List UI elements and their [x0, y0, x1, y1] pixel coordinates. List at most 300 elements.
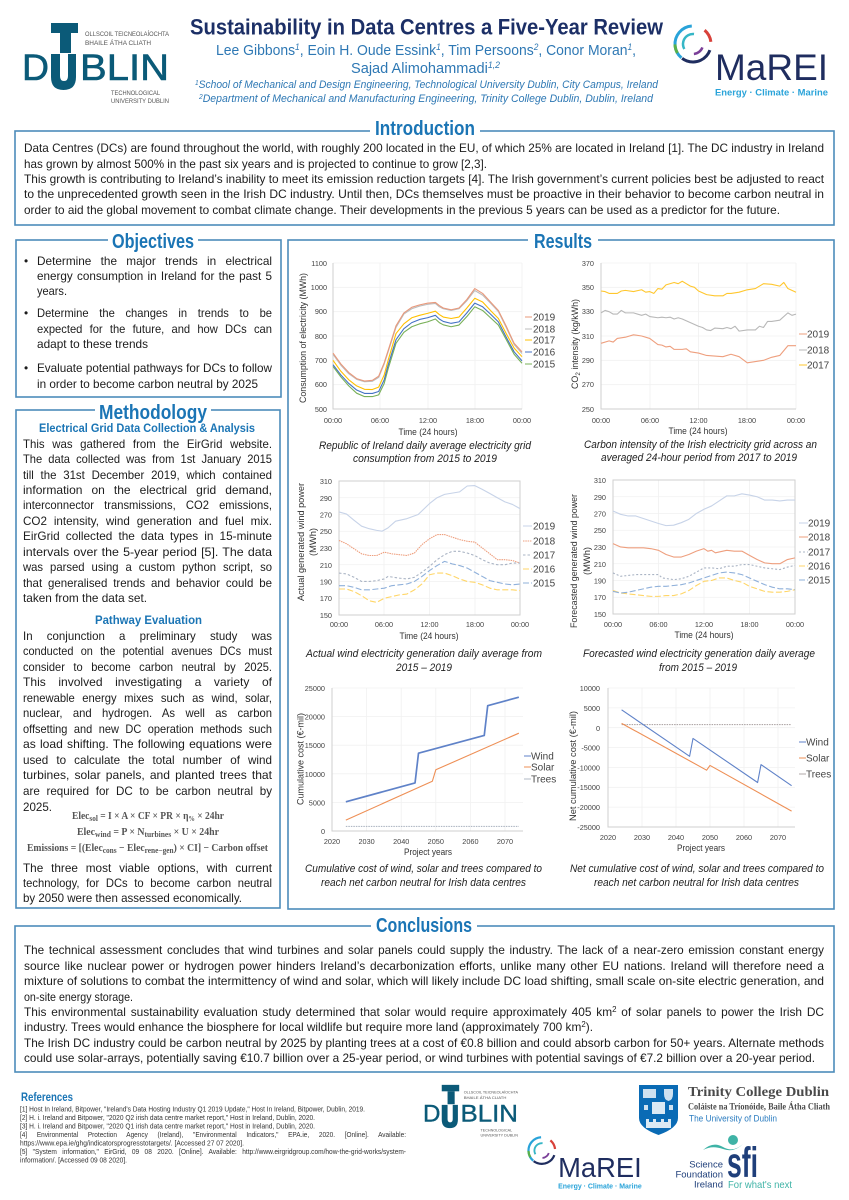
chart: cumulative cost: 10000 — [305, 770, 325, 779]
chart: electricity consumption: 800 — [315, 332, 327, 341]
chart: cumulative cost: Cumulative cost (€-mil) — [296, 713, 306, 805]
text block: pathway evaluation: renewable energy mixes such as wind, solar, — [23, 691, 272, 705]
heading: methodology: Methodology — [99, 401, 207, 424]
equations: × 24hr — [195, 811, 224, 822]
chart: actual wind generation: 18:00 — [466, 620, 484, 629]
authors: 1 — [436, 42, 441, 52]
chart: forecasted wind generation: 250 — [594, 526, 606, 535]
authors: Sajad Alimohammadi — [351, 60, 492, 77]
logo: Trinity College Dublin: Trinity College Dublin — [688, 1085, 829, 1100]
text block: introduction: to the unprecedented growth seen in the Irish DC industry. Until then, DCs themselves must be proactive in their behavior to become carbon neutral in — [24, 187, 824, 201]
chart: cumulative cost: 2060 — [462, 837, 479, 846]
logo: TU Dublin (footer): OLLSCOIL TEICNEOLAÍOCHTA — [464, 1089, 518, 1094]
authors: 1,2 — [488, 60, 500, 70]
bullet list: objectives: years. — [37, 284, 67, 298]
chart: cumulative cost: 2030 — [358, 837, 375, 846]
text block: data collection: that generalised trends and behavior could be — [23, 576, 272, 590]
legend: Trees — [531, 774, 556, 786]
legend: 2017 — [808, 548, 831, 558]
text block: pathway evaluation: consider to become carbon neutral by 2025. — [23, 660, 272, 674]
text block: conclusions: 2 — [581, 1020, 586, 1029]
text block: conclusions: on-site energy storage. — [24, 990, 133, 1004]
legend: 2017 — [807, 360, 830, 372]
authors: 1 — [295, 42, 300, 52]
text block: viable options: The three most viable options, with current — [23, 861, 273, 875]
logo: Science Foundation Ireland: Foundation — [675, 1170, 723, 1180]
chart: carbon intensity: 18:00 — [738, 416, 756, 425]
references: [2] H. i. Ireland and Bitpower, "2020 Q2 irish data centre market report," Host in Ireland, Dublin, 2020. — [20, 1113, 315, 1122]
logo: TU Dublin (footer): BLIN — [460, 1101, 518, 1128]
chart: net cumulative cost: -5000 — [581, 744, 600, 752]
text block: conclusions — [24, 943, 824, 1065]
chart: net cumulative cost: 2060 — [736, 833, 752, 842]
data series 2019-2017 — [601, 281, 796, 363]
panel: results — [288, 230, 834, 909]
text block: conclusions: The technical assessment concludes that wind turbines and solar panels could supply the industry. The lack of a near-zero emission constant energy — [24, 943, 824, 957]
chart: electricity consumption: 1000 — [311, 283, 327, 292]
text block: data collection: EirGrid collected the data types in 15-minute — [23, 529, 272, 543]
chart: actual wind generation: 190 — [320, 578, 332, 586]
chart: forecasted wind generation: 310 — [594, 476, 606, 485]
chart: net cumulative cost: 10000 — [580, 684, 600, 693]
logo: MaREI: MaREI — [715, 47, 828, 88]
chart: forecasted wind generation: Forecasted generated wind power — [569, 494, 579, 628]
data series 2019-2015 — [339, 486, 520, 602]
logo: Trinity College Dublin — [639, 1085, 830, 1135]
text block: data collection: information on the electrical grid demand, — [23, 483, 272, 497]
equations: rene−gen — [145, 846, 174, 855]
chart: actual wind generation: 250 — [320, 527, 332, 536]
text block: data collection: The data collected was from 1st January 2015 — [23, 452, 272, 466]
chart: actual wind generation: 00:00 — [330, 620, 348, 629]
data series wind, solar, trees — [346, 697, 519, 826]
chart: cumulative cost — [296, 684, 556, 889]
logo: TU Dublin: OLLSCOIL TEICNEOLAÍOCHTA — [85, 31, 169, 38]
bullet list: objectives — [24, 254, 272, 391]
authors — [216, 42, 636, 77]
legend: 2018 — [533, 324, 556, 336]
legend: 2016 — [808, 562, 831, 572]
heading: introduction: Introduction — [375, 117, 475, 140]
data series 2019-2015 — [333, 289, 522, 397]
title: Sustainability in Data Centres a Five-Year Review — [190, 14, 664, 40]
chart: net cumulative cost: Project years — [677, 843, 725, 853]
chart: cumulative cost: 2070 — [497, 837, 513, 846]
chart: cumulative cost: 20000 — [305, 712, 325, 722]
text block: viable options: by 2050 were then assessed economically. — [23, 891, 242, 905]
affiliations: School of Mechanical and Design Engineering, Technological University Dublin, City Campus, Ireland — [199, 79, 659, 91]
caption — [319, 440, 532, 465]
chart: net cumulative cost: 0 — [596, 724, 600, 733]
affiliations: 2 — [198, 94, 203, 101]
legend — [799, 738, 831, 780]
chart: carbon intensity: intensity (kg/kWh) — [570, 299, 580, 372]
chart: electricity consumption: 00:00 — [324, 416, 342, 425]
text block: viable options — [23, 861, 273, 905]
chart: net cumulative cost: 2020 — [600, 833, 616, 842]
chart: cumulative cost: 15000 — [305, 741, 325, 750]
chart: forecasted wind generation: Time (24 hours) — [674, 630, 734, 640]
chart: electricity consumption: Time (24 hours) — [398, 427, 458, 437]
affiliations — [195, 79, 659, 105]
chart: net cumulative cost: -20000 — [577, 803, 600, 812]
text block: data collection — [22, 437, 272, 605]
legend: Solar — [806, 754, 830, 764]
references: [1] Host In Ireland, Bitpower, "Ireland's Data Hosting Industry Q1 2019 Update," Host In Ireland, Bitpower, Dublin, 2019. — [20, 1104, 365, 1114]
equations: Elec — [72, 811, 91, 822]
caption — [583, 648, 815, 674]
chart: actual wind generation: Actual generated wind power — [296, 483, 306, 601]
panel: conclusions — [15, 914, 834, 1072]
chart: actual wind generation: 00:00 — [511, 620, 529, 629]
caption — [570, 863, 824, 889]
text block: viable options: technology, for DCs to become carbon neutral — [23, 876, 272, 890]
legend: 2015 — [533, 360, 556, 370]
logo: Science Foundation Ireland: Science — [689, 1160, 723, 1170]
text block: conclusions: ). — [586, 1020, 593, 1034]
logo: Science Foundation Ireland: sfi — [727, 1139, 758, 1187]
text block: pathway evaluation: nuclear, and hydrogen. As well as carbon — [23, 706, 272, 720]
authors: Lee Gibbons — [216, 42, 301, 59]
logo: TU Dublin — [22, 23, 169, 105]
chart: net cumulative cost: -15000 — [577, 783, 600, 792]
equations: % — [189, 815, 195, 823]
equations: = P × N — [111, 827, 145, 838]
logo: TU Dublin (footer): UNIVERSITY DUBLIN — [481, 1133, 518, 1138]
chart: forecasted wind generation: 190 — [594, 576, 606, 586]
bullet list: objectives: Determine the major trends in electrical — [37, 254, 272, 268]
legend: 2015 — [533, 578, 556, 590]
logo: TU Dublin: TECHNOLOGICAL — [111, 91, 161, 97]
text block: introduction: order to aid the global movement to combat climate change. Their developments in the previous 5 years can be used as a predictor for the future. — [24, 203, 780, 217]
chart: electricity consumption: 00:00 — [513, 416, 531, 425]
chart: net cumulative cost: -10000 — [577, 764, 600, 772]
chart: carbon intensity: 350 — [582, 283, 594, 292]
chart: net cumulative cost: 2040 — [668, 833, 684, 842]
chart: cumulative cost: 2040 — [393, 837, 409, 846]
chart: forecasted wind generation: 270 — [594, 510, 606, 518]
logo: TU Dublin: D — [22, 47, 49, 88]
chart: actual wind generation: 150 — [320, 611, 332, 620]
chart: net cumulative cost: 2030 — [634, 833, 650, 842]
legend: 2018 — [807, 346, 830, 356]
chart: forecasted wind generation: 00:00 — [604, 620, 622, 629]
chart: forecasted wind generation: 06:00 — [649, 620, 668, 629]
logo: TU Dublin: BLIN — [80, 47, 169, 88]
chart: electricity consumption: 06:00 — [371, 416, 389, 425]
chart: electricity consumption: 700 — [315, 356, 327, 365]
caption — [305, 648, 542, 674]
bullet list: objectives: • — [24, 254, 28, 268]
text block: pathway evaluation: as load shifting. The following equations were — [23, 737, 272, 751]
chart: forecasted wind generation: 230 — [594, 543, 606, 552]
logo: TU Dublin (footer): BHAILE ÁTHA CLIATH — [464, 1095, 507, 1100]
chart: actual wind generation: Time (24 hours) — [400, 631, 458, 641]
affiliations: Department of Mechanical and Manufacturing Engineering, Trinity College Dublin, Dublin, Ireland — [203, 93, 654, 105]
text block: pathway evaluation: In conjunction a preliminary study was — [23, 629, 272, 643]
chart: actual wind generation: 270 — [320, 510, 332, 520]
chart: net cumulative cost: 2070 — [770, 833, 786, 842]
equations: × U × 24hr — [171, 827, 219, 838]
panel: methodology — [16, 401, 280, 908]
references: [5] "System information," EirGrid, 09 08 2020. [Online]. Available: http://www.eirgridgroup.com/how-the-grid-works/system- — [20, 1147, 406, 1156]
legend — [524, 752, 556, 786]
caption: Republic of Ireland daily average electricity grid — [319, 440, 532, 452]
logo: Trinity College Dublin: Coláiste na Tríonóide, Baile Átha Cliath — [688, 1102, 830, 1112]
chart: forecasted wind generation — [569, 476, 831, 674]
legend: 2019 — [533, 522, 556, 532]
equations: Elec — [77, 827, 96, 838]
affiliations: 1 — [195, 80, 199, 87]
references: References — [21, 1092, 73, 1104]
equations: turbines — [145, 830, 171, 839]
text block: data collection: CO2 intensity, wind generation and fuel mix. — [23, 514, 272, 528]
chart: cumulative cost: 5000 — [309, 798, 325, 808]
text block: pathway evaluation: This involved investigating a variety of — [23, 675, 273, 689]
text block: pathway evaluation — [23, 629, 273, 814]
caption: reach net carbon neutral for Irish data centres — [321, 877, 527, 889]
bullet list: objectives: • — [24, 306, 28, 320]
heading: conclusions: Conclusions — [376, 914, 472, 937]
equations: cons — [103, 846, 117, 855]
caption: averaged 24-hour period from 2017 to 2019 — [601, 452, 797, 464]
chart: net cumulative cost: Net cumulative cost (€-mil) — [568, 711, 578, 821]
bullet list: objectives: in order to become carbon neutral by 2025 — [37, 377, 258, 391]
chart: carbon intensity: 06:00 — [641, 416, 659, 425]
chart: carbon intensity: 370 — [582, 259, 594, 268]
chart: carbon intensity: 290 — [582, 356, 594, 365]
heading: objectives: Objectives — [112, 230, 194, 253]
legend: Wind — [531, 752, 554, 762]
text block: conclusions: mixture of solutions to combat the intermittency of wind and solar, which will likely include DC load shifting, small scale on-site electric generation, and — [24, 974, 824, 988]
equations: Emissions = [(Elec — [27, 843, 109, 854]
chart: cumulative cost: 2050 — [428, 837, 444, 846]
chart: forecasted wind generation: 12:00 — [695, 620, 713, 629]
equations: ) × CI] − Carbon offset — [174, 843, 268, 854]
equations — [27, 811, 268, 855]
chart: forecasted wind generation: 290 — [594, 493, 606, 502]
logo: MaREI: Energy · Climate · Marine — [715, 88, 828, 98]
legend: 2015 — [808, 576, 831, 586]
logo: Science Foundation Ireland: Ireland — [694, 1180, 723, 1190]
legend — [523, 522, 556, 590]
chart: net cumulative cost — [568, 684, 831, 889]
legend: 2017 — [533, 336, 556, 346]
legend: 2017 — [533, 550, 556, 562]
chart: forecasted wind generation: 00:00 — [786, 620, 804, 629]
text block: pathway evaluation: conducted on the potential avenues DCs must — [23, 644, 273, 658]
chart: electricity consumption: 900 — [315, 307, 327, 316]
chart: electricity consumption: Consumption of electricity (MWh) — [298, 273, 308, 403]
legend: 2016 — [533, 348, 556, 358]
authors: 1 — [627, 42, 632, 52]
text block: data collection: This was gathered from the EirGrid website. — [23, 437, 272, 451]
subheading: electrical grid data: Electrical Grid Data Collection & Analysis — [39, 423, 255, 435]
authors: , Tim Persoons — [441, 42, 534, 59]
logo: Science Foundation Ireland: For what's next — [728, 1179, 792, 1191]
logo: MaREI (footer): MaREI — [558, 1152, 642, 1183]
logo: MaREI (footer) — [523, 1132, 642, 1191]
text block: conclusions: of solar panels to power the Irish DC — [617, 1005, 824, 1019]
logo: Science Foundation Ireland — [675, 1135, 792, 1191]
legend: 2018 — [808, 532, 831, 544]
chart: carbon intensity: 00:00 — [787, 416, 805, 425]
chart: forecasted wind generation: 150 — [594, 610, 606, 619]
references: [4] Environmental Protection Agency (Ireland), "Environmental Indicators," EPA.ie, 2020. [Online]. Available: — [20, 1130, 406, 1139]
text block: pathway evaluation: are required for DC to be carbon neutral by — [23, 784, 272, 798]
chart: actual wind generation: 12:00 — [420, 620, 439, 629]
subheading: pathway evaluation: Pathway Evaluation — [95, 615, 202, 627]
references: [3] H. i. Ireland and Bitpower, "2020 Q1 irish data centre market report," Host in Ireland, Dublin, 2020. — [20, 1122, 315, 1130]
equations: sol — [89, 814, 99, 823]
caption: reach net carbon neutral for Irish data centres — [594, 877, 800, 889]
logo: TU Dublin (footer): TECHNOLOGICAL — [481, 1127, 513, 1132]
chart: electricity consumption: 1100 — [311, 259, 327, 268]
text block: introduction: This growth is contributing to Ireland’s inability to meet its emission reduction targets [4]. The Irish government’s current policies best be adjusted to react — [24, 172, 825, 186]
text block: pathway evaluation: 2025. — [23, 800, 52, 814]
chart: cumulative cost: Project years — [404, 847, 452, 857]
chart: actual wind generation: 310 — [320, 477, 332, 486]
equations: − Elec — [117, 843, 145, 854]
caption: Carbon intensity of the Irish electricity grid across an — [584, 439, 817, 451]
bullet list: objectives: Evaluate potential pathways for DCs to follow — [37, 361, 272, 375]
chart: actual wind generation — [296, 477, 556, 674]
chart: forecasted wind generation: 170 — [594, 593, 606, 602]
caption: Net cumulative cost of wind, solar and trees compared to — [570, 863, 824, 875]
caption: Cumulative cost of wind, solar and trees compared to — [305, 863, 542, 875]
panel: introduction — [15, 117, 834, 225]
logo: TU Dublin: UNIVERSITY DUBLIN — [111, 99, 169, 105]
chart: actual wind generation: (MWh) — [308, 528, 318, 556]
logo: Trinity College Dublin: The University of Dublin — [689, 1114, 777, 1124]
chart: cumulative cost: 0 — [321, 827, 325, 836]
text block: conclusions: The Irish DC industry could be carbon neutral by 2025 by planting trees at a cost of €0.8 billion and could absorb carbon for 50+ years. Alternate methods — [24, 1036, 824, 1050]
panel: objectives — [16, 230, 281, 397]
text block: pathway evaluation: turbines, solar panels, and planted trees that — [23, 768, 273, 782]
chart: net cumulative cost: 5000 — [584, 704, 600, 713]
chart: actual wind generation: 230 — [320, 544, 332, 553]
legend: 2019 — [807, 330, 830, 340]
authors: , Conor Moran — [538, 42, 627, 59]
chart: electricity consumption: 12:00 — [419, 416, 437, 425]
caption: consumption from 2015 to 2019 — [353, 453, 497, 465]
caption: 2015 – 2019 — [395, 662, 452, 674]
chart: electricity consumption: 500 — [315, 405, 327, 414]
chart: electricity consumption — [298, 259, 556, 465]
bullet list: objectives: Determine the changes in trends to be — [37, 306, 272, 320]
text block: conclusions: This environmental sustainability evaluation study determined that solar would require approximately 405 km — [24, 1005, 618, 1019]
legend: Solar — [531, 762, 555, 774]
chart: net cumulative cost: -25000 — [577, 823, 600, 832]
chart: carbon intensity: 310 — [582, 332, 594, 341]
heading: results: Results — [534, 230, 592, 253]
authors: 2 — [533, 42, 538, 52]
bullet list: objectives: energy consumption in Ireland for the past 5 — [37, 269, 272, 283]
legend: 2019 — [533, 312, 556, 324]
chart: cumulative cost: 25000 — [305, 684, 325, 693]
logo: TU Dublin: BHAILE ÁTHA CLIATH — [85, 40, 151, 47]
text block: conclusions: source like nuclear power or hydrogen power hinders Ireland’s decarbonization efforts, unlike many other EU nations. Ireland will therefore need a — [24, 959, 824, 973]
chart: actual wind generation: 170 — [320, 594, 332, 603]
chart: electricity consumption: 18:00 — [466, 416, 484, 425]
chart: electricity consumption: 600 — [315, 380, 327, 389]
legend: Trees — [806, 770, 831, 780]
chart: carbon intensity: 270 — [582, 380, 594, 389]
text block: data collection: interconnector transmissions, CO2 emissions, — [23, 498, 272, 512]
legend: Wind — [806, 738, 829, 748]
data series 2019-2015 — [613, 494, 795, 596]
chart: carbon intensity — [570, 259, 830, 464]
bullet list: objectives: adapt to these trends — [37, 337, 148, 351]
chart: net cumulative cost: 2050 — [702, 833, 718, 842]
legend — [799, 518, 831, 586]
references: https://www.epa.ie/ghg/indicatorsprogresstotargets/. [Accessed 27 07 2020]. — [20, 1138, 244, 1148]
text block: conclusions: 2 — [612, 1005, 617, 1014]
text block: introduction: has grown by almost 500% in the past six years and is projected to continue to grow [2,3]. — [24, 157, 487, 171]
chart: carbon intensity: 00:00 — [592, 416, 610, 425]
text block: conclusions: industry. Trees would enhance the biosphere for local wildlife but require more land (approximately 700 km — [24, 1020, 589, 1034]
chart: forecasted wind generation: 18:00 — [740, 620, 759, 629]
authors: , — [632, 42, 636, 59]
chart: carbon intensity: 12:00 — [689, 416, 708, 425]
legend — [525, 312, 556, 370]
text block: data collection: taken from the data set. — [23, 591, 147, 605]
text block: data collection: was parsed using a custom python script, so — [22, 560, 272, 574]
chart: carbon intensity: CO — [570, 375, 580, 389]
equations: = I × A × CF × PR × η — [98, 811, 189, 822]
legend: 2018 — [533, 536, 556, 548]
legend: 2019 — [808, 518, 831, 530]
caption — [584, 439, 817, 464]
legend: 2016 — [533, 564, 556, 576]
text block: introduction: Data Centres (DCs) are found throughout the world, with roughly 200 located in the EU, of which 25% are located in Ireland [1]. The DC industry in Ireland — [24, 141, 824, 155]
references — [20, 1092, 406, 1164]
bullet list: objectives: • — [24, 361, 28, 375]
chart: actual wind generation: 06:00 — [375, 620, 393, 629]
chart: carbon intensity: 250 — [582, 405, 594, 414]
chart: actual wind generation: 290 — [320, 494, 332, 503]
logo: TU Dublin (footer) — [423, 1085, 518, 1138]
text block: pathway evaluation: offsetting and new DC operation methods such — [23, 722, 272, 736]
data series wind, solar, trees — [622, 710, 792, 811]
caption: from 2015 – 2019 — [659, 662, 737, 674]
logo: TU Dublin (footer): D — [423, 1101, 440, 1128]
icon: shield — [639, 1085, 678, 1135]
chart: cumulative cost: 2020 — [324, 837, 340, 846]
chart: carbon intensity: Time (24 hours) — [668, 426, 728, 436]
text block: introduction — [24, 141, 825, 217]
references: information/. [Accessed 09 08 2020]. — [20, 1156, 127, 1164]
caption — [305, 863, 542, 889]
legend — [799, 330, 830, 372]
text block: data collection: till the 31st December 2019, which contained — [23, 468, 272, 482]
text block: pathway evaluation: used to calculate the total number of wind — [23, 753, 272, 767]
caption: Actual wind electricity generation daily average from — [305, 648, 542, 660]
chart: carbon intensity: 330 — [582, 307, 594, 316]
caption: Forecasted wind electricity generation daily average — [583, 648, 815, 660]
authors: , Eoin H. Oude Essink — [300, 42, 437, 59]
text block: data collection: intervals over the 5-year period [5]. The data — [23, 545, 272, 559]
chart: forecasted wind generation: (MWh) — [582, 547, 592, 575]
bullet list: objectives: expected for the future, and how DCs can — [37, 322, 272, 336]
equations: wind — [95, 830, 111, 839]
text block: conclusions: could use solar-arrays, potentially saving €10.7 billion over a 25-year period, or wind turbines with potential savings of €7.2 billion over a 20-year period. — [24, 1051, 815, 1065]
logo: MaREI — [668, 19, 828, 99]
logo: MaREI (footer): Energy · Climate · Marine — [558, 1184, 642, 1191]
chart: carbon intensity: 2 — [575, 372, 582, 376]
chart: actual wind generation: 210 — [320, 561, 332, 570]
chart: forecasted wind generation: 210 — [594, 560, 606, 569]
